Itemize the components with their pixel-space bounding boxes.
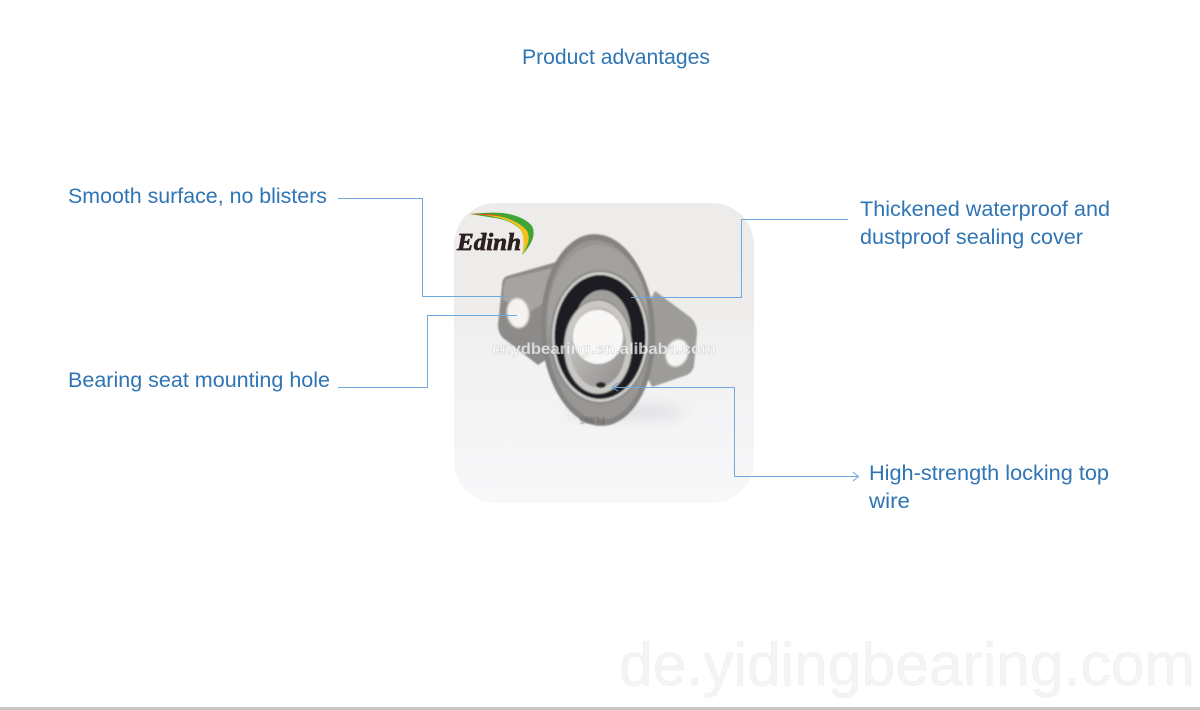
- left mounting ear: [497, 262, 556, 366]
- leader line: [338, 316, 517, 388]
- bore opening: [573, 310, 623, 364]
- inner collar: [577, 288, 632, 333]
- callout: sealing cover: Thickened waterproof and: [860, 198, 1110, 221]
- site watermark: de.yidingbearing.com: [619, 631, 1195, 698]
- black seal: [554, 275, 646, 399]
- sealing ring: [550, 270, 650, 404]
- callout: mounting hole: Bearing seat mounting hole: [68, 369, 330, 392]
- logo: Edinh: [456, 213, 534, 256]
- logo: Edinh: Edinh: [456, 230, 521, 256]
- panel: product photo: [454, 203, 754, 503]
- watermark on photo: cnydbearing.en.alibaba.com: [492, 341, 716, 358]
- callout: locking top wire: wire: [868, 490, 910, 513]
- callout: locking top wire: High-strength locking top: [869, 462, 1109, 485]
- callout: mounting hole: [68, 316, 517, 392]
- callout: locking top wire: [612, 382, 1109, 513]
- callout: sealing cover: dustproof sealing cover: [860, 226, 1083, 249]
- callout: smooth surface: Smooth surface, no blisters: [68, 185, 327, 208]
- left mounting hole: [505, 297, 531, 329]
- bore wall: [570, 307, 626, 387]
- icon: flanged bearing housing: [498, 231, 697, 429]
- callout: sealing cover: [631, 198, 1110, 298]
- leader line with arrows: [612, 382, 858, 481]
- set screw: [596, 382, 606, 388]
- leader line: [631, 220, 848, 298]
- housing marking: FL995: [579, 415, 605, 425]
- housing body: [542, 233, 656, 427]
- title: Product advantages: [522, 46, 710, 69]
- right mounting ear: [648, 290, 698, 387]
- bottom rule: [0, 707, 1200, 710]
- right mounting hole: [664, 338, 690, 368]
- inner race face: [564, 300, 632, 394]
- leader line: [338, 198, 507, 296]
- callout: smooth surface: [68, 185, 507, 296]
